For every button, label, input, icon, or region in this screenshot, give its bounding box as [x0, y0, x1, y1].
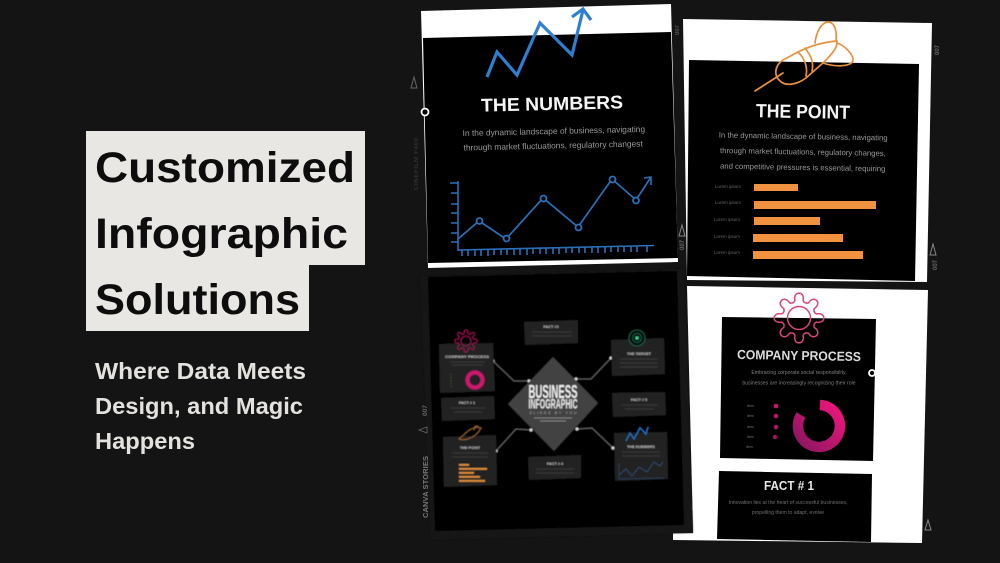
card: fact 3: FACT #3	[543, 325, 559, 329]
film strip markings: CINEFILM F400	[414, 137, 420, 190]
panel body text: through market fluctuations, regulatory changes,	[720, 146, 886, 158]
subtitle: Happens	[95, 428, 195, 454]
side labels	[419, 405, 430, 518]
legend: Item	[746, 445, 753, 449]
film triangles	[686, 499, 931, 530]
heading text: Customized	[95, 144, 355, 192]
card: the point	[443, 426, 497, 487]
panel black area	[428, 271, 684, 531]
icon: gear	[774, 293, 824, 343]
panel paper	[673, 286, 928, 543]
legend: Item	[747, 435, 754, 439]
bar chart: Lorem ipsum	[715, 184, 741, 189]
card: fact 4: FACT # 4	[547, 462, 564, 466]
panel body text: businesses are increasingly recognizing their role	[742, 380, 856, 386]
card: the numbers: THE NUMBERS	[627, 445, 655, 449]
center diamond: INFOGRAPHIC	[528, 396, 578, 412]
panel paper	[683, 19, 932, 282]
fact body text	[729, 500, 847, 516]
panel black area: company process	[720, 317, 876, 461]
panel body text	[718, 131, 888, 173]
panel title: COMPANY PROCESS	[737, 347, 861, 364]
card: company process	[439, 330, 495, 393]
legend: Item	[747, 414, 754, 418]
panel: business infographic overview	[420, 269, 693, 540]
card: the point: THE POINT	[460, 446, 481, 450]
panel black area: fact 1	[717, 471, 872, 542]
card: fact 5	[612, 392, 666, 417]
panel body text: through market fluctuations, regulatory changest	[463, 138, 644, 153]
heading highlight shape	[86, 131, 365, 331]
card: fact 3	[524, 320, 578, 345]
panel body text	[462, 124, 646, 153]
legend	[746, 404, 778, 449]
card: fact 1: FACT # 1	[459, 401, 475, 405]
icon: dart	[755, 22, 853, 91]
donut chart	[798, 405, 840, 447]
panel body text: Embracing corporate social responsibility,	[751, 370, 847, 376]
fact body text: Innovation lies at the heart of successful businesses,	[729, 500, 847, 506]
heading block	[86, 131, 365, 331]
card: fact 4	[528, 455, 581, 480]
subtitle: Where Data Meets	[95, 358, 306, 384]
panel body text: In the dynamic landscape of business, navigating	[462, 124, 646, 138]
panel title: THE NUMBERS	[481, 91, 623, 116]
card: the numbers	[614, 427, 668, 481]
card: fact 5: FACT # 5	[631, 398, 647, 402]
card: the target: THE TARGET	[627, 352, 652, 356]
heading text: Solutions	[95, 276, 300, 324]
center diamond: SLIDES BY YOU	[530, 411, 577, 415]
legend: Item	[747, 404, 754, 408]
panel: the point	[683, 19, 932, 282]
ring notch	[422, 108, 428, 116]
bar chart: Lorem ipsum	[714, 217, 740, 222]
bar chart	[714, 184, 876, 259]
ring notch	[869, 370, 875, 376]
subtitle: Design, and Magic	[95, 393, 303, 419]
heading text: Infographic	[95, 210, 348, 258]
legend: Item	[747, 425, 754, 429]
heading text	[95, 144, 355, 324]
fact body text: propelling them to adapt, evolve	[752, 510, 824, 516]
card: the target	[611, 330, 665, 376]
panel black area	[687, 60, 919, 281]
center diamond: BUSINESS	[528, 382, 578, 402]
side labels: 007	[422, 405, 429, 416]
bar chart: Lorem ipsum	[714, 250, 740, 255]
card: fact 1	[441, 396, 495, 421]
film strip markings	[411, 24, 941, 270]
film strip markings: 007	[680, 239, 686, 250]
film strip markings: 007	[935, 44, 941, 55]
fact title: FACT # 1	[764, 479, 814, 493]
panel black area	[423, 32, 678, 263]
panel body text	[742, 370, 856, 386]
subtitle	[95, 358, 306, 454]
icon: rising arrow	[487, 9, 591, 77]
panel: company process	[673, 286, 931, 543]
panel title: THE POINT	[756, 101, 851, 124]
panel paper	[421, 4, 678, 268]
film strip markings: 007	[933, 259, 939, 270]
bar chart: Lorem ipsum	[715, 200, 741, 205]
card: company process: COMPANY PROCESS	[445, 355, 490, 359]
panel body text: and competitive pressures is essential, requiring	[720, 162, 885, 173]
panel: the numbers	[421, 4, 678, 268]
center diamond	[508, 357, 598, 451]
line chart	[450, 176, 654, 256]
connectors	[493, 358, 613, 451]
panel frame	[420, 269, 693, 540]
side labels: CANVA STORIES	[421, 456, 430, 518]
panel body text: In the dynamic landscape of business, navigating	[719, 131, 888, 142]
bar chart: Lorem ipsum	[714, 234, 740, 239]
film strip markings: 007	[675, 24, 681, 35]
